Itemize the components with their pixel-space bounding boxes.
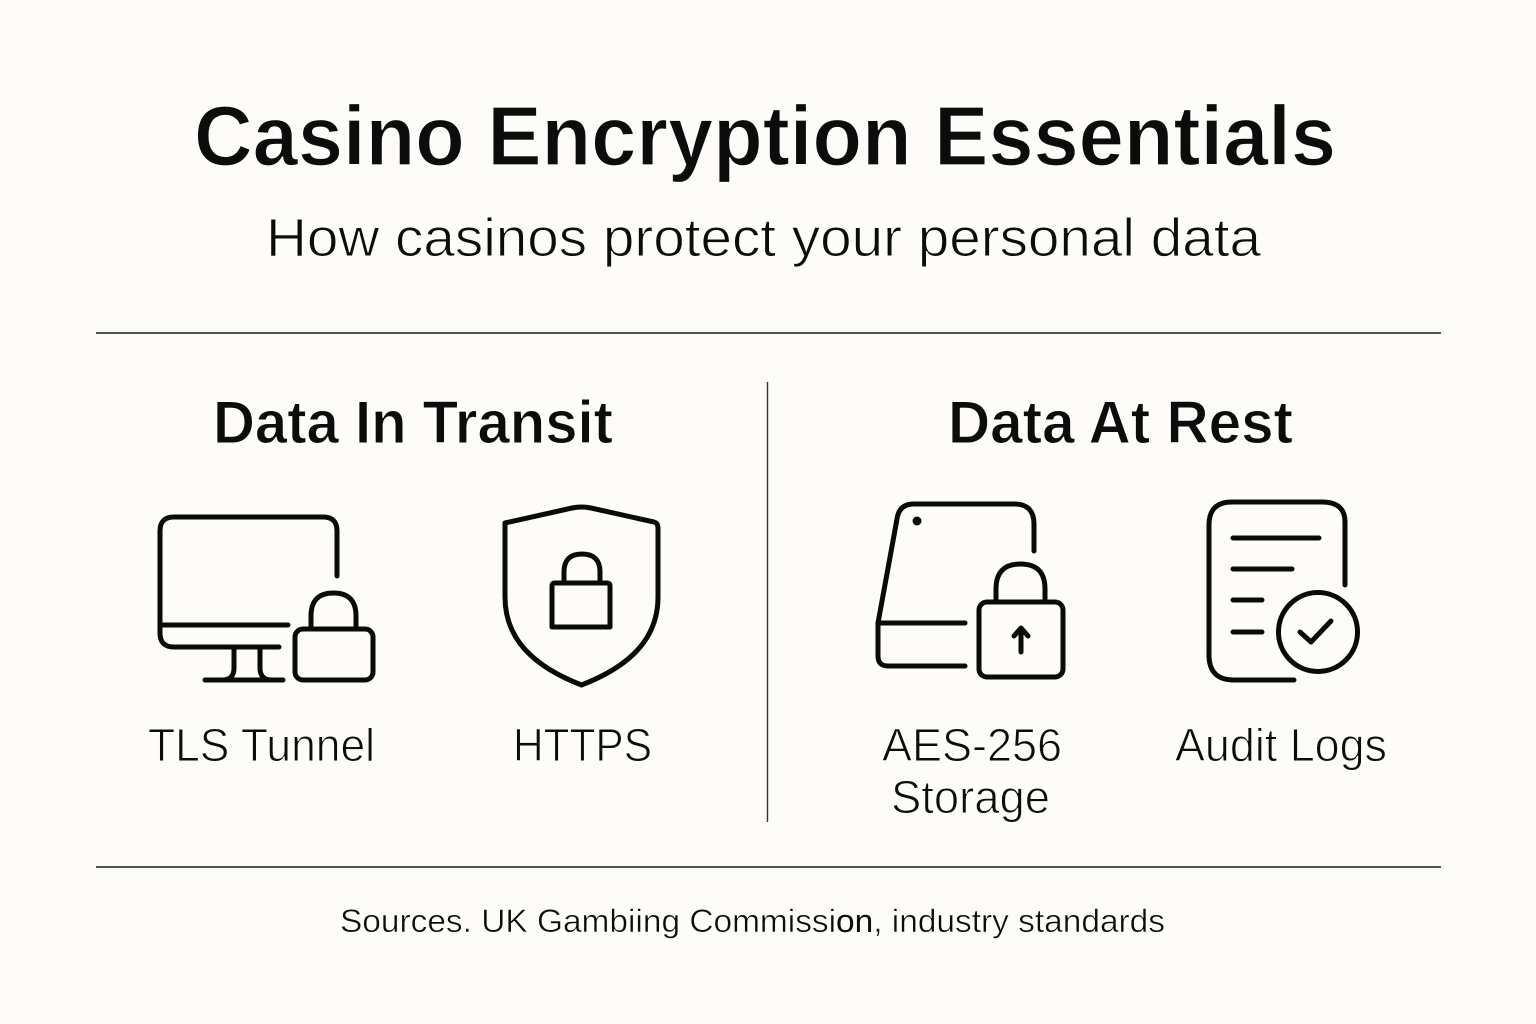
heading: data in transit: Data In Transit xyxy=(213,389,613,456)
heading: data at rest: Data At Rest xyxy=(948,389,1293,456)
subtitle: How casinos protect your personal data xyxy=(266,208,1262,268)
icon: hard drive with padlock xyxy=(878,504,1063,677)
label: AES-256 Storage: AES-256 xyxy=(882,719,1062,771)
title: Casino Encryption Essentials xyxy=(194,89,1336,183)
label: AES-256 Storage xyxy=(882,719,1062,823)
label: Audit Logs: Audit Logs xyxy=(1175,719,1387,771)
label: HTTPS: HTTPS xyxy=(513,719,652,771)
icon: monitor with padlock xyxy=(160,517,373,680)
label: TLS Tunnel: TLS Tunnel xyxy=(148,719,375,771)
icon: shield with padlock xyxy=(505,507,658,685)
icon: document with check badge xyxy=(1209,502,1358,680)
panel: data in transit xyxy=(148,389,658,771)
label: AES-256 Storage: Storage xyxy=(891,771,1050,823)
footer: sources: Sources. UK Gambiing Commissi on, industry standards xyxy=(340,903,1165,939)
panel: data at rest xyxy=(878,389,1387,823)
